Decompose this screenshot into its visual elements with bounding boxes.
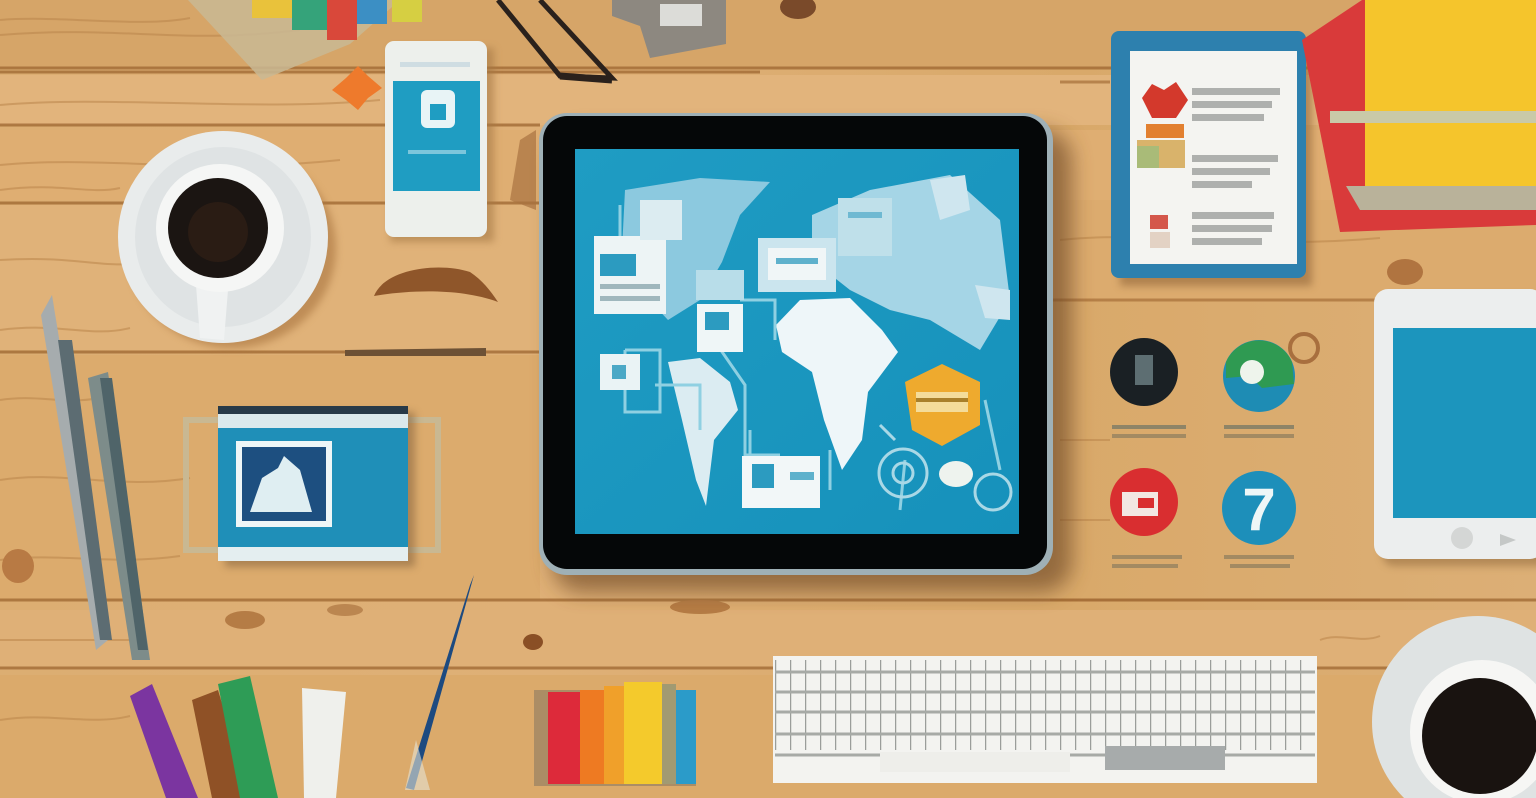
top-left clear tray with coloured pins	[188, 0, 422, 110]
tablet shadow	[552, 130, 1072, 592]
tablet with world map	[539, 113, 1053, 575]
app icon: red badge	[1110, 468, 1182, 568]
top object: grey clip	[612, 0, 816, 58]
colour swatch book	[534, 682, 696, 786]
blue pen	[405, 575, 474, 790]
map: connector lines	[620, 205, 1000, 510]
coffee cup left	[118, 131, 336, 348]
small blue card left	[186, 406, 438, 567]
map: small speech bubble	[939, 461, 973, 487]
coffee cup bottom right	[1372, 616, 1536, 798]
icon: phone padlock	[421, 90, 455, 128]
map: continents	[622, 175, 1010, 506]
glasses at top	[498, 0, 612, 80]
app icon: blue number badge	[1222, 471, 1296, 568]
map cards	[594, 198, 892, 508]
phone top	[385, 41, 494, 242]
map: small circle icons	[879, 425, 1011, 510]
document frame top right	[1111, 31, 1312, 286]
red and yellow folders top right	[1302, 0, 1536, 232]
keyboard	[773, 656, 1317, 783]
app icon: green and blue globe	[1223, 334, 1318, 438]
app icon: dark circle	[1110, 338, 1186, 438]
icon: building badge	[236, 441, 332, 527]
map: yellow shield badge	[905, 364, 980, 446]
tablet right	[1374, 289, 1536, 566]
pencils and ruler left	[41, 295, 150, 660]
app icon: blue number badge: 7	[1242, 476, 1276, 543]
coloured markers bottom left	[130, 676, 346, 798]
